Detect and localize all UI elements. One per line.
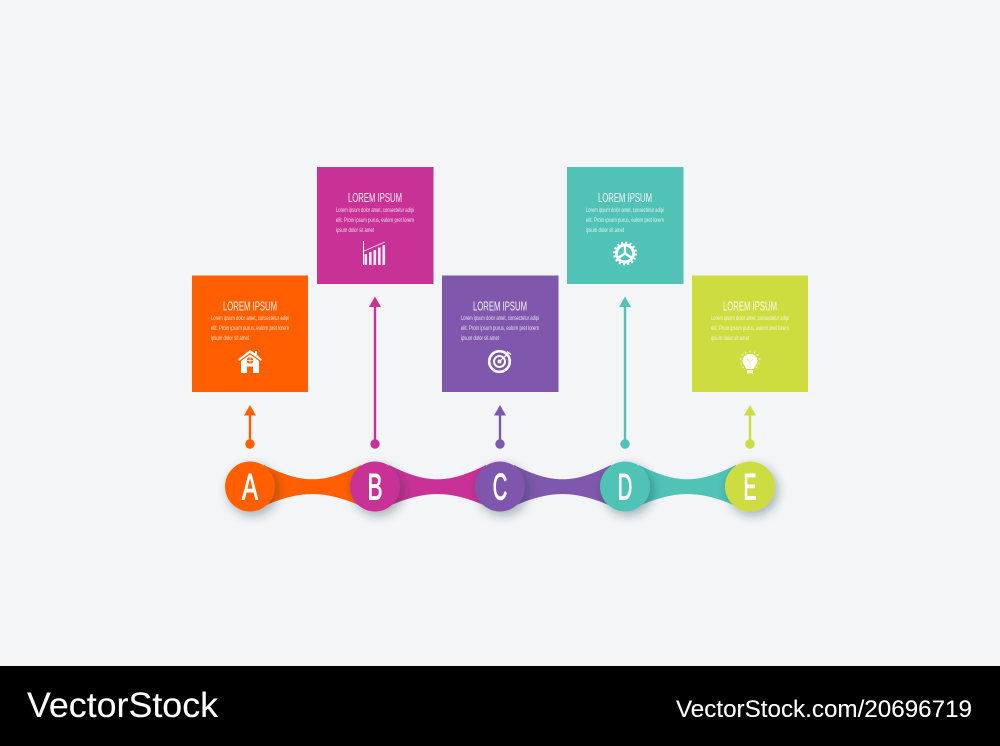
- node E: E: [744, 466, 756, 508]
- node C: C: [493, 466, 507, 508]
- icon: gear: [614, 243, 636, 264]
- node A: [225, 462, 275, 512]
- body text E: elit. Proin ipsum purus, eulorn pret lorem: [711, 325, 789, 332]
- panel: C: [442, 276, 558, 392]
- icon: bar chart: [363, 241, 385, 265]
- node A: A: [242, 466, 258, 508]
- timeline connectors: [264, 465, 736, 506]
- footer bar: [0, 666, 1000, 746]
- icon: light bulb: [740, 350, 760, 374]
- body text A: ipsum dolor sit amet: [211, 335, 249, 342]
- body text C: elit. Proin ipsum purus, eulorn pret lorem: [461, 325, 539, 332]
- heading D: LOREM IPSUM: [598, 190, 652, 205]
- heading B: LOREM IPSUM: [348, 190, 402, 205]
- body text A: [211, 315, 289, 342]
- body text D: ipsum dolor sit amet: [586, 227, 624, 234]
- panel: A: [192, 276, 308, 392]
- node D: D: [618, 466, 632, 508]
- body text E: ipsum dolor sit amet: [711, 335, 749, 342]
- heading C: LOREM IPSUM: [473, 298, 527, 314]
- body text D: elit. Proin ipsum purus, eulorn pret lorem: [586, 217, 664, 224]
- arrow C: [494, 405, 506, 449]
- node D: [600, 462, 650, 512]
- body text B: [336, 207, 414, 234]
- connector A to B: [264, 465, 361, 506]
- body text C: ipsum dolor sit amet: [461, 335, 499, 342]
- body text D: [586, 207, 664, 234]
- connector B to C: [389, 465, 486, 506]
- icon: target: [489, 351, 511, 372]
- icon: house: [238, 350, 262, 373]
- heading A: LOREM IPSUM: [223, 298, 277, 314]
- body text E: Lorem ipsum dolor amet, consectetur adipi: [711, 315, 789, 322]
- node E: [725, 462, 775, 512]
- node B: B: [368, 466, 382, 508]
- connector C to D: [514, 465, 611, 506]
- panel: D: [567, 167, 684, 284]
- body text D: Lorem ipsum dolor amet, consectetur adipi: [586, 207, 664, 214]
- heading E: LOREM IPSUM: [723, 298, 777, 314]
- arrow A: [244, 405, 256, 449]
- connector D to E: [639, 465, 736, 506]
- node B: [350, 462, 400, 512]
- node C: [475, 462, 525, 512]
- body text C: [461, 315, 539, 342]
- footer url: VectorStock.com/20696719: [676, 696, 972, 723]
- body text C: Lorem ipsum dolor amet, consectetur adipi: [461, 315, 539, 322]
- body text A: Lorem ipsum dolor amet, consectetur adipi: [211, 315, 289, 322]
- body text B: elit. Proin ipsum purus, eulorn pret lorem: [336, 217, 414, 224]
- body text B: Lorem ipsum dolor amet, consectetur adipi: [336, 207, 414, 214]
- arrow D: [619, 296, 631, 449]
- footer logo: VectorStock: [27, 686, 219, 725]
- panel: B: [317, 167, 434, 284]
- body text A: elit. Proin ipsum purus, eulorn pret lorem: [211, 325, 289, 332]
- panel: E: [692, 276, 808, 392]
- body text E: [711, 315, 789, 342]
- arrow B: [369, 296, 381, 449]
- arrow E: [744, 405, 756, 449]
- body text B: ipsum dolor sit amet: [336, 227, 374, 234]
